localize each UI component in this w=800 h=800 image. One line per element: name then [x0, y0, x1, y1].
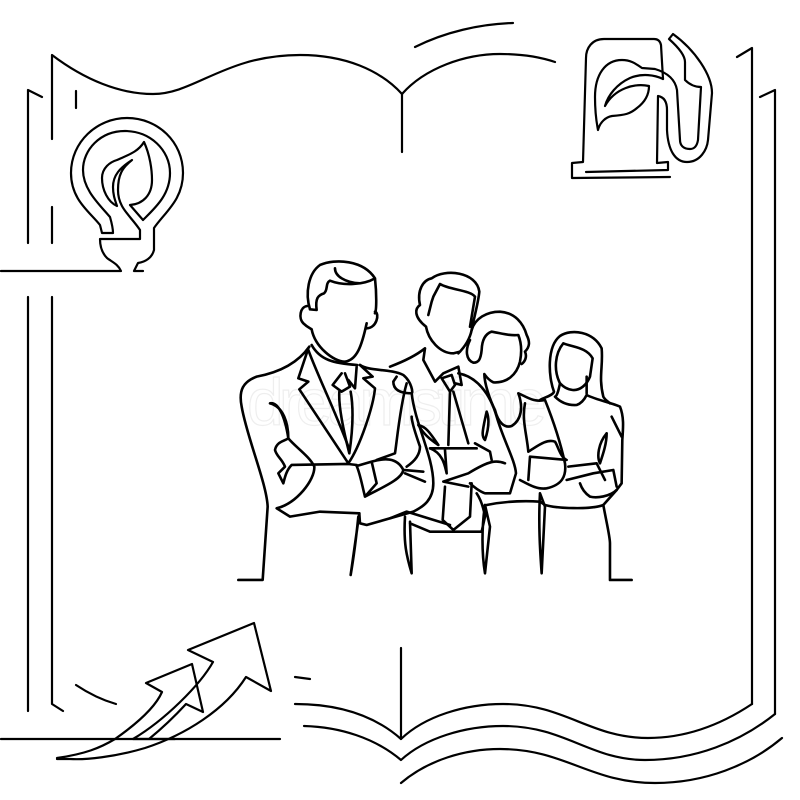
figure: second man and two women — [390, 273, 632, 580]
right shoulder and arm — [277, 365, 433, 525]
collar and tie — [312, 345, 357, 453]
open book: right page edges — [737, 48, 775, 714]
folded sleeve, cuff and fingers — [357, 417, 425, 497]
open book: left page edges — [28, 90, 310, 711]
open book: top edge and spine — [52, 23, 555, 152]
second man arms — [418, 373, 516, 530]
first woman head — [467, 312, 529, 382]
second woman head and hair — [540, 332, 610, 403]
face and ears — [300, 306, 377, 362]
left hand — [270, 403, 357, 483]
front leg — [351, 513, 359, 575]
watermark: dreamstime — [247, 365, 547, 439]
lapels — [298, 348, 375, 463]
jacket left side — [238, 347, 309, 580]
second man head — [416, 273, 479, 353]
icon: eco light bulb — [1, 118, 183, 271]
open book: bottom page curves — [295, 648, 782, 783]
second woman body and arms — [555, 377, 623, 497]
legs — [539, 493, 632, 580]
hair — [308, 261, 376, 313]
first woman body — [484, 374, 617, 508]
second man trousers — [390, 493, 490, 573]
figure: lead man in suit — [238, 261, 433, 580]
arrow: double growth arrows — [1, 623, 280, 759]
second man collar and tie — [390, 348, 468, 445]
icon: eco fuel pump — [572, 34, 712, 178]
